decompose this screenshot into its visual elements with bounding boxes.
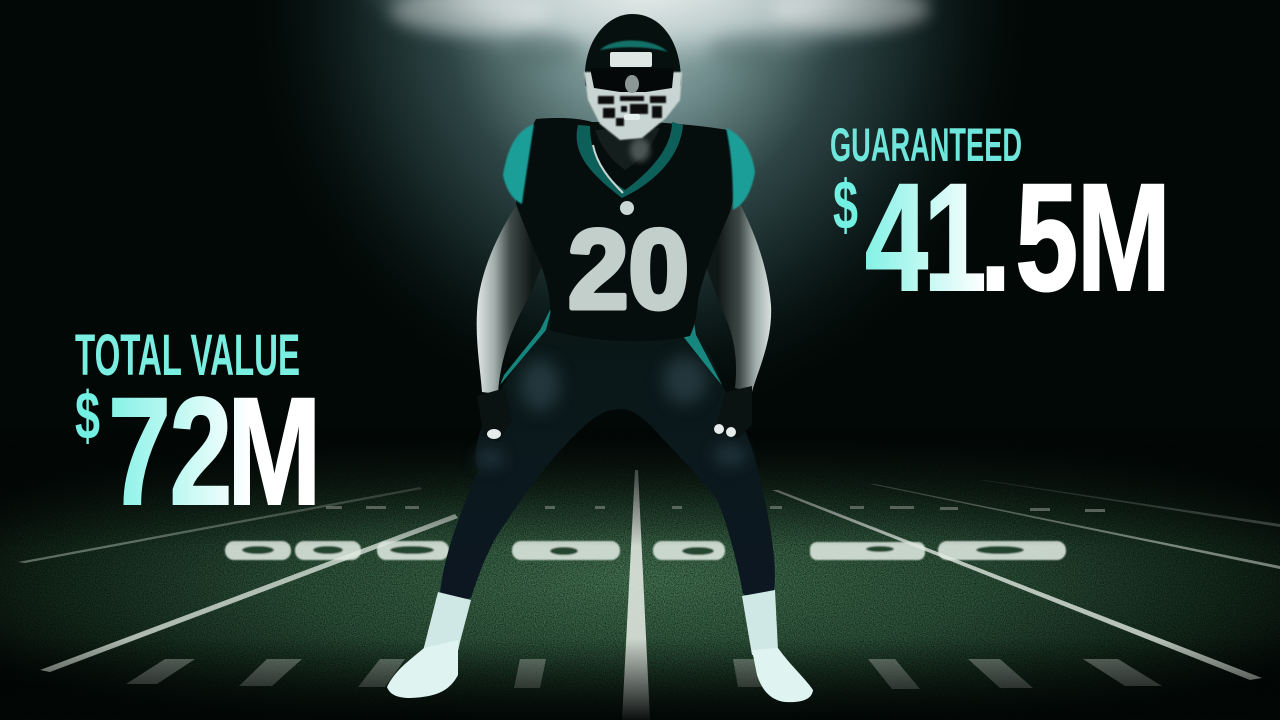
brow plate: [610, 52, 652, 67]
nose highlight: [625, 75, 639, 93]
right sock: [742, 590, 778, 655]
visor: [590, 68, 674, 92]
teal side panels: [500, 296, 722, 385]
face mask: [584, 72, 682, 140]
gloves: [477, 386, 752, 442]
helmet teal highlight: [600, 40, 668, 52]
player legs: [440, 328, 775, 599]
field fade to dark at top and bottom: [0, 430, 1280, 720]
player: [387, 14, 813, 702]
upper hash marks: [326, 506, 1105, 512]
mask openings: [598, 96, 666, 126]
field sidelines: [18, 480, 1280, 680]
callout: guaranteed: [830, 118, 1171, 323]
chest neck area and chain: [593, 128, 660, 215]
lower hash marks: [126, 659, 1162, 689]
helmet shell: [585, 14, 681, 95]
guaranteed label: GUARANTEED: [830, 118, 1022, 171]
right cleat: [752, 648, 813, 702]
mouth guard: [624, 114, 640, 120]
helmet: [584, 14, 682, 140]
yard numbers painted on field: [225, 541, 1066, 560]
football field: [0, 430, 1280, 720]
total value amount: 72M: [108, 365, 321, 537]
jersey number 20: 20: [568, 207, 689, 332]
teal shoulder caps: [503, 124, 755, 210]
callout: total value: [75, 323, 321, 537]
total value dollar sign: $: [75, 378, 100, 454]
guaranteed dollar sign: $: [833, 166, 858, 244]
spotlight glow: [200, 0, 1080, 430]
left sock: [422, 592, 471, 660]
total value label: TOTAL VALUE: [75, 323, 300, 388]
jersey: [516, 118, 735, 341]
collar: [577, 122, 683, 198]
pants highlights: [476, 356, 746, 466]
player arms: [477, 196, 771, 394]
guaranteed amount: 41.5M: [865, 151, 1171, 323]
socks and cleats: [387, 590, 813, 702]
left cleat: [387, 640, 458, 698]
center line: [622, 470, 650, 720]
